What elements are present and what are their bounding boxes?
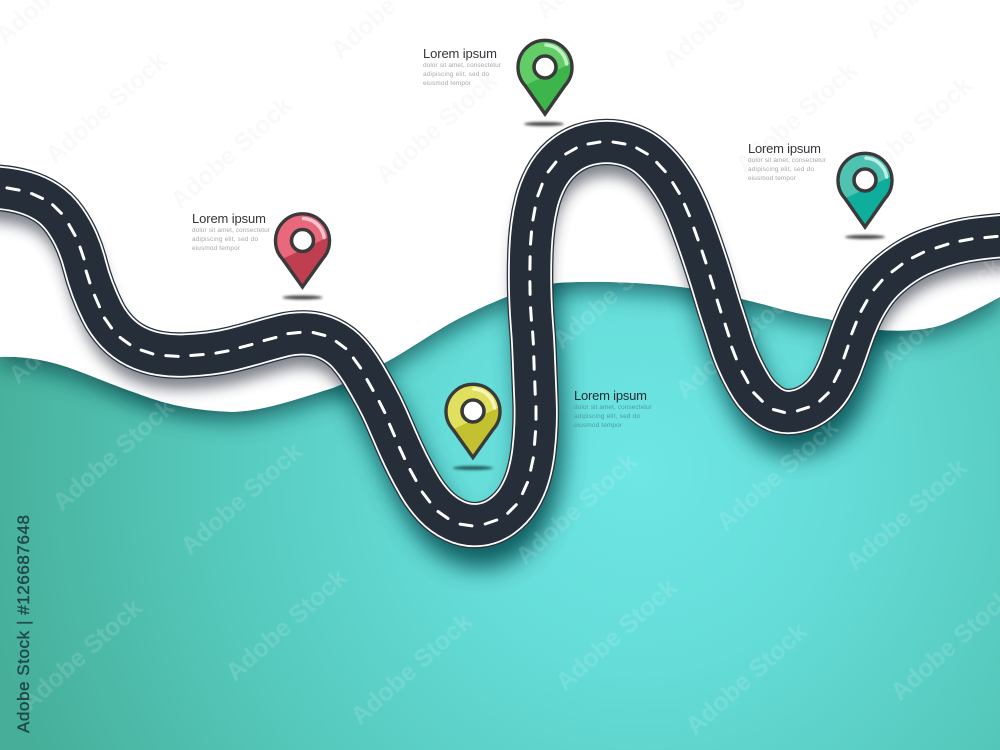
text block: red pin: dolor sit amet, consectetur	[192, 227, 271, 234]
text block: green pin	[423, 46, 502, 87]
text block: green pin: eiusmod tempor	[423, 80, 472, 87]
text block: green pin: adipiscing elit, sed do	[423, 71, 489, 78]
Adobe Stock watermarks on white	[0, 0, 993, 214]
text block: teal pin: dolor sit amet, consectetur	[748, 157, 827, 164]
text block: yellow pin: eiusmod tempor	[574, 422, 623, 429]
Adobe Stock watermarks on teal: Adobe Stock	[547, 231, 680, 354]
text block: green pin: dolor sit amet, consectetur	[423, 62, 502, 69]
text block: yellow pin	[574, 388, 653, 429]
text block: red pin: eiusmod tempor	[192, 245, 241, 252]
winding road	[0, 142, 1000, 526]
Adobe Stock watermarks on teal: Adobe Stock	[670, 281, 803, 404]
Adobe Stock watermarks on teal: Adobe Stock	[365, 236, 498, 359]
stock id: Adobe Stock | #126687648	[14, 515, 33, 733]
Adobe Stock watermarks on teal: Adobe Stock	[15, 593, 148, 716]
Adobe Stock watermarks on teal: Adobe Stock	[175, 437, 308, 560]
pin: teal	[838, 153, 892, 239]
road shadow on white	[0, 165, 1000, 400]
text block: yellow pin: dolor sit amet, consectetur	[574, 404, 653, 411]
pin: green	[518, 40, 572, 126]
road shadow on teal	[102, 282, 912, 584]
white paper shape	[0, 0, 1000, 412]
text block: teal pin: eiusmod tempor	[748, 175, 797, 182]
text block: red pin: adipiscing elit, sed do	[192, 236, 258, 243]
white paper shape shadow	[0, 282, 1000, 436]
Adobe Stock watermarks on teal	[3, 231, 1000, 740]
text block: red pin: Lorem ipsum	[192, 211, 266, 226]
Adobe Stock watermarks on teal: Adobe Stock	[680, 617, 813, 740]
Adobe Stock watermarks on teal: Adobe Stock	[510, 447, 643, 570]
Adobe Stock watermarks on teal: Adobe Stock	[3, 266, 136, 389]
Adobe Stock watermarks on teal: Adobe Stock	[840, 453, 973, 576]
pin: red	[276, 214, 330, 300]
text block: red pin	[192, 211, 271, 252]
text block: teal pin	[748, 141, 827, 182]
Adobe Stock watermarks on teal: Adobe Stock	[47, 393, 180, 516]
text block: teal pin: Lorem ipsum	[748, 141, 821, 156]
Adobe Stock watermarks on teal: Adobe Stock	[550, 573, 683, 696]
road centre dashes	[7, 142, 997, 526]
text block: yellow pin: adipiscing elit, sed do	[574, 413, 640, 420]
text block: yellow pin: Lorem ipsum	[574, 388, 647, 403]
text block: teal pin: adipiscing elit, sed do	[748, 166, 814, 173]
Adobe Stock watermarks on teal: Adobe Stock	[345, 607, 478, 730]
Adobe Stock watermarks on teal: Adobe Stock	[711, 413, 844, 536]
text block: green pin: Lorem ipsum	[423, 46, 497, 61]
pin: yellow	[446, 384, 500, 470]
Adobe Stock watermarks on teal: Adobe Stock	[220, 563, 353, 686]
